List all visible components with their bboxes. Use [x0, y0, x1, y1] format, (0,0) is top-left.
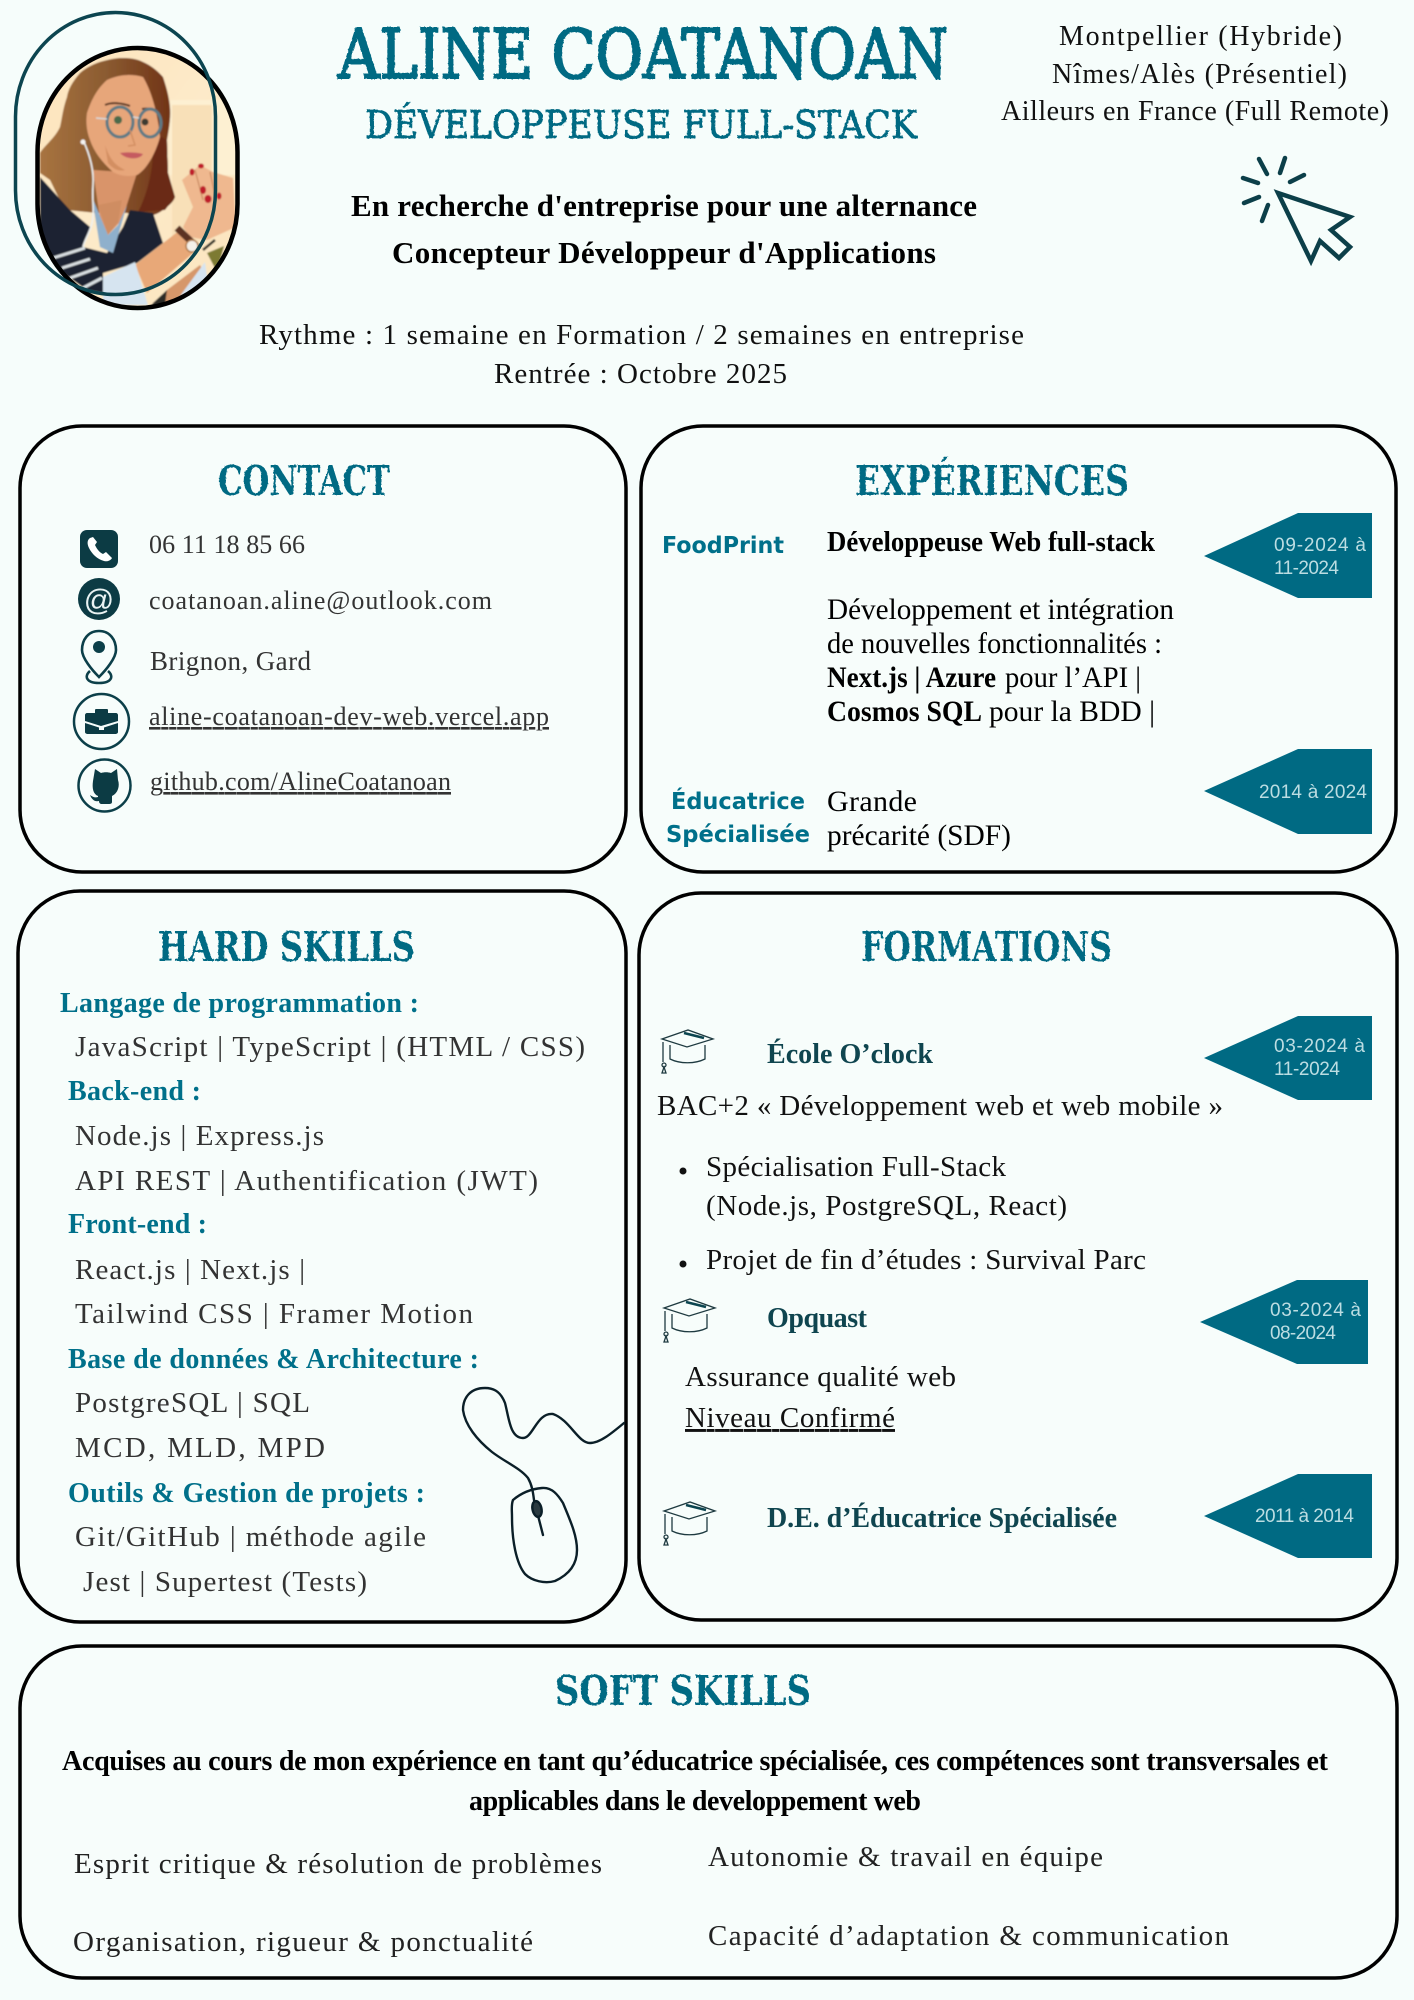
soft skills list: Organisation, rigueur & ponctualité — [73, 1926, 533, 1958]
rhythm and start date: Rythme : 1 semaine en Formation / 2 semaines en entreprise — [259, 319, 1024, 351]
date tag: educator — [1204, 749, 1372, 834]
formation: O'clock: (Node.js, PostgreSQL, React) — [706, 1190, 1067, 1222]
icon: computer mouse — [463, 1388, 624, 1582]
experience: FoodPrint — [662, 526, 1174, 728]
skills: front-end: React.js | Next.js | — [75, 1254, 305, 1286]
soft skills list — [73, 1841, 1230, 1958]
skills: back-end: Back-end : — [68, 1076, 201, 1107]
formation: O'clock: BAC+2 « Développement web et web mobile » — [657, 1090, 1223, 1122]
formation: Opquast: Opquast — [767, 1303, 868, 1334]
job title: DÉVELOPPEUSE FULL-STACK — [365, 103, 918, 147]
heading: hard skills: HARD SKILLS — [158, 923, 415, 971]
soft skills list: Esprit critique & résolution de problèmes — [74, 1848, 602, 1880]
skills: databases: Base de données & Architecture : — [68, 1344, 479, 1375]
panel: soft skills — [20, 1646, 1397, 1978]
experience: FoodPrint: Développement et intégration — [827, 593, 1174, 626]
date tag: educator: 2014 à 2024 — [1259, 782, 1367, 803]
panel: experiences — [641, 426, 1396, 872]
soft skills list: Capacité d’adaptation & communication — [708, 1920, 1230, 1952]
formation: Opquast: Niveau Confirmé — [685, 1402, 895, 1434]
experience: FoodPrint: Cosmos SQL — [827, 695, 982, 728]
skills: front-end: Tailwind CSS | Framer Motion — [75, 1298, 474, 1330]
icon: phone — [80, 530, 118, 568]
icon: cursor click — [1243, 158, 1350, 261]
experience: FoodPrint: Next.js | Azure — [827, 661, 996, 694]
soft skills intro: Acquises au cours de mon expérience en tant qu’éducatrice spécialisée, ces compétences sont transversales et — [62, 1746, 1329, 1777]
formation: Opquast — [685, 1303, 956, 1434]
soft skills intro — [62, 1746, 1329, 1817]
contact location: Brignon, Gard — [150, 646, 312, 676]
heading: experiences: EXPÉRIENCES — [855, 456, 1129, 505]
icon: email: @ — [84, 584, 114, 617]
search statement — [351, 188, 977, 270]
icon: email — [78, 578, 120, 620]
contact email: coatanoan.aline@outlook.com — [149, 586, 492, 615]
experience: FoodPrint: FoodPrint — [662, 533, 784, 559]
date tag: D.E. — [1204, 1474, 1372, 1558]
search statement: Concepteur Développeur d'Applications — [392, 235, 936, 270]
contact github link: github.com/AlineCoatanoan — [150, 767, 451, 796]
icon: github — [78, 760, 130, 812]
date tag: O'clock — [1204, 1016, 1372, 1100]
skills: tools: Git/GitHub | méthode agile — [75, 1521, 426, 1553]
formation: O'clock: Spécialisation Full-Stack — [706, 1151, 1006, 1183]
icon: graduation cap 2 — [664, 1299, 715, 1342]
rhythm and start date: Rentrée : Octobre 2025 — [494, 358, 787, 390]
heading: formations: FORMATIONS — [861, 923, 1112, 971]
date tag: D.E.: 2011 à 2014 — [1255, 1506, 1354, 1527]
date tag: FoodPrint — [1204, 513, 1372, 598]
date tag: FoodPrint: 11-2024 — [1274, 558, 1339, 579]
panel: formations — [639, 893, 1397, 1620]
skills: tools: Jest | Supertest (Tests) — [83, 1566, 367, 1598]
skills: tools: Outils & Gestion de projets : — [68, 1478, 425, 1509]
decorative oval outline — [16, 12, 216, 294]
experience: FoodPrint: pour l’API | — [1005, 661, 1141, 694]
photo portrait — [37, 48, 238, 308]
skills: databases: PostgreSQL | SQL — [75, 1387, 310, 1419]
skills: languages — [60, 988, 585, 1063]
skills: databases: MCD, MLD, MPD — [75, 1432, 325, 1464]
formation: O'clock: École O’clock — [767, 1039, 933, 1070]
soft skills list: Autonomie & travail en équipe — [708, 1841, 1103, 1873]
contact phone: 06 11 18 85 66 — [149, 530, 305, 559]
experience: FoodPrint: de nouvelles fonctionnalités : — [827, 627, 1162, 660]
header — [16, 12, 1389, 390]
icon: briefcase — [74, 694, 129, 749]
panel: hard skills — [18, 891, 626, 1622]
date tag: Opquast: 08-2024 — [1270, 1323, 1336, 1344]
icon: graduation cap 1 — [662, 1030, 713, 1073]
icon: location pin — [82, 631, 116, 683]
rhythm and start date — [259, 319, 1024, 390]
date tag: FoodPrint: 09-2024 à — [1274, 535, 1366, 556]
locations: Montpellier (Hybride) — [1059, 21, 1342, 52]
heading: contact: CONTACT — [218, 457, 390, 505]
skills: languages: Langage de programmation : — [60, 988, 419, 1019]
formation: O'clock: Projet de fin d’études : Survival Parc — [706, 1244, 1146, 1276]
date tag: O'clock: 11-2024 — [1274, 1059, 1340, 1080]
icon: graduation cap 3 — [664, 1502, 715, 1545]
soft skills intro: applicables dans le developpement web — [469, 1786, 921, 1817]
experience: educator: Grande — [827, 785, 917, 818]
skills: databases — [68, 1344, 479, 1464]
experience: educator: précarité (SDF) — [827, 819, 1011, 852]
heading: soft skills: SOFT SKILLS — [555, 1667, 811, 1715]
date tag: Opquast — [1200, 1280, 1368, 1364]
locations: Nîmes/Alès (Présentiel) — [1052, 59, 1347, 90]
skills: tools — [68, 1478, 426, 1598]
experience: FoodPrint: pour la BDD | — [989, 695, 1155, 728]
date tag: O'clock: 03-2024 à — [1274, 1036, 1365, 1057]
contact portfolio link: aline-coatanoan-dev-web.vercel.app — [149, 702, 549, 731]
formation: O'clock — [657, 1039, 1223, 1276]
skills: front-end: Front-end : — [68, 1209, 207, 1240]
name title: ALINE COATANOAN — [337, 16, 948, 95]
panel: contact — [20, 426, 626, 872]
experience: FoodPrint: Développeuse Web full-stack — [827, 526, 1156, 558]
experience: educator — [666, 785, 1011, 852]
skills: back-end: Node.js | Express.js — [75, 1120, 324, 1152]
date tag: Opquast: 03-2024 à — [1270, 1300, 1361, 1321]
experience: educator: Éducatrice — [671, 787, 805, 815]
formation: Opquast: Assurance qualité web — [685, 1361, 956, 1393]
locations — [1001, 21, 1389, 127]
formation: D.E.: D.E. d’Éducatrice Spécialisée — [767, 1503, 1117, 1534]
search statement: En recherche d'entreprise pour une alternance — [351, 188, 977, 223]
skills: back-end: API REST | Authentification (JWT) — [75, 1165, 538, 1197]
skills: back-end — [68, 1076, 538, 1197]
skills: front-end — [68, 1209, 474, 1330]
experience: educator: Spécialisée — [666, 822, 810, 848]
skills: languages: JavaScript | TypeScript | (HTML / CSS) — [75, 1031, 585, 1063]
locations: Ailleurs en France (Full Remote) — [1001, 96, 1389, 127]
